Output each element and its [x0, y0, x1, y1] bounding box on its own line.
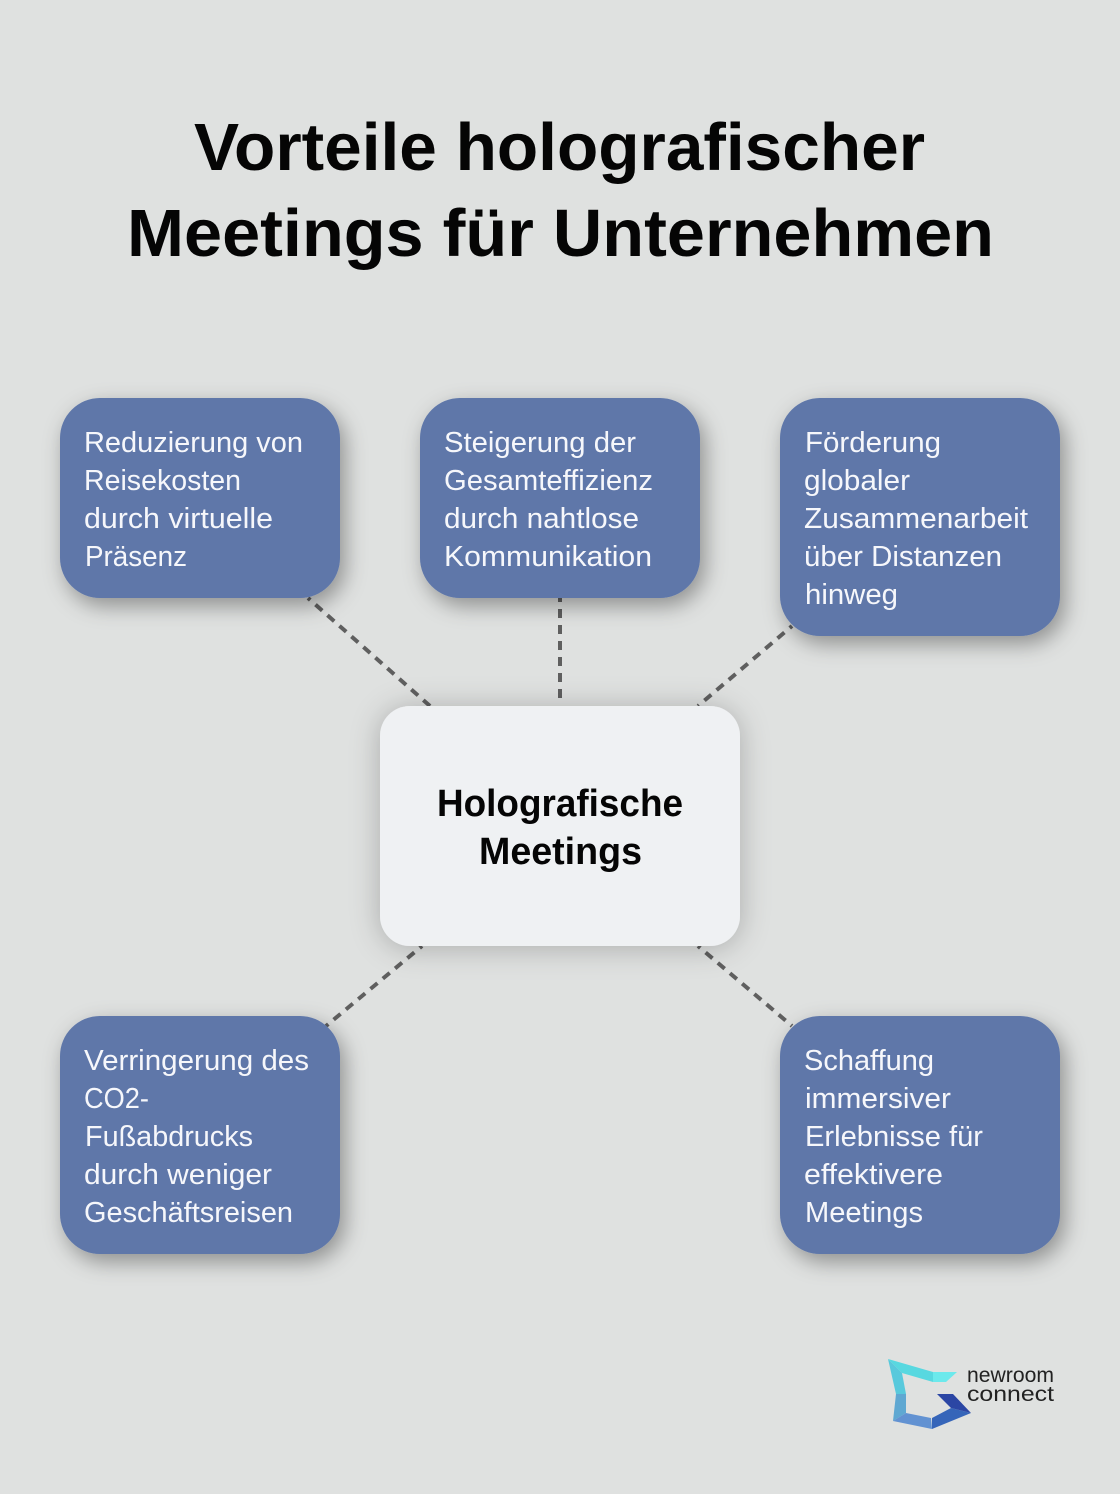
title: Meetings für Unternehmen — [127, 196, 994, 271]
connector: top right — [698, 626, 792, 706]
panel: Zusammenarbeit: hinweg — [805, 579, 898, 611]
panel: immersive Erlebnisse — [780, 1016, 1060, 1254]
panel: Reisekosten: Reduzierung von — [84, 427, 303, 459]
connector: top centre — [558, 598, 562, 698]
title: Vorteile holografischer — [194, 110, 925, 185]
panel: Zusammenarbeit: Förderung — [805, 427, 941, 459]
panel: Zusammenarbeit: Zusammenarbeit — [804, 503, 1028, 535]
panel: centre node: Holografische — [437, 783, 683, 825]
panel: centre node — [380, 706, 740, 946]
panel: CO2 — [60, 1016, 340, 1254]
title — [127, 110, 994, 271]
panel: Reisekosten: Präsenz — [85, 541, 187, 573]
panel: Gesamteffizienz: Steigerung der — [444, 427, 636, 459]
connector: top left — [308, 598, 430, 706]
panel: Gesamteffizienz — [420, 398, 700, 598]
panel: immersive Erlebnisse: Meetings — [805, 1197, 923, 1229]
panel: Reisekosten: durch virtuelle — [84, 503, 273, 535]
panel: CO2: Geschäftsreisen — [84, 1197, 293, 1229]
panel: CO2: Verringerung des — [84, 1045, 309, 1077]
panel: CO2: CO2- — [84, 1083, 149, 1115]
panel: Zusammenarbeit: globaler — [804, 465, 910, 497]
panel: immersive Erlebnisse: immersiver — [805, 1083, 951, 1115]
logo: newroom connect — [888, 1359, 1054, 1429]
panel: immersive Erlebnisse: Erlebnisse für — [805, 1121, 983, 1153]
panel: immersive Erlebnisse: effektivere — [804, 1159, 943, 1191]
panel: CO2: durch weniger — [84, 1159, 272, 1191]
panel: Zusammenarbeit: über Distanzen — [804, 541, 1002, 573]
panel: immersive Erlebnisse: Schaffung — [804, 1045, 934, 1077]
panel: Gesamteffizienz: Kommunikation — [444, 541, 652, 573]
panel: Reisekosten: Reisekosten — [84, 465, 241, 497]
wordmark: newroom — [967, 1364, 1054, 1387]
icon: logo mark — [888, 1359, 971, 1429]
panel: CO2: Fußabdrucks — [85, 1121, 253, 1153]
wordmark: connect — [967, 1383, 1054, 1406]
panel: Reisekosten — [60, 398, 340, 598]
connector: bottom left — [326, 946, 422, 1026]
connector: bottom right — [698, 946, 792, 1026]
wordmark — [967, 1364, 1054, 1406]
panel: Gesamteffizienz: Gesamteffizienz — [444, 465, 653, 497]
panel: Zusammenarbeit — [780, 398, 1060, 636]
panel: centre node: Meetings — [479, 831, 642, 873]
panel: Gesamteffizienz: durch nahtlose — [444, 503, 639, 535]
